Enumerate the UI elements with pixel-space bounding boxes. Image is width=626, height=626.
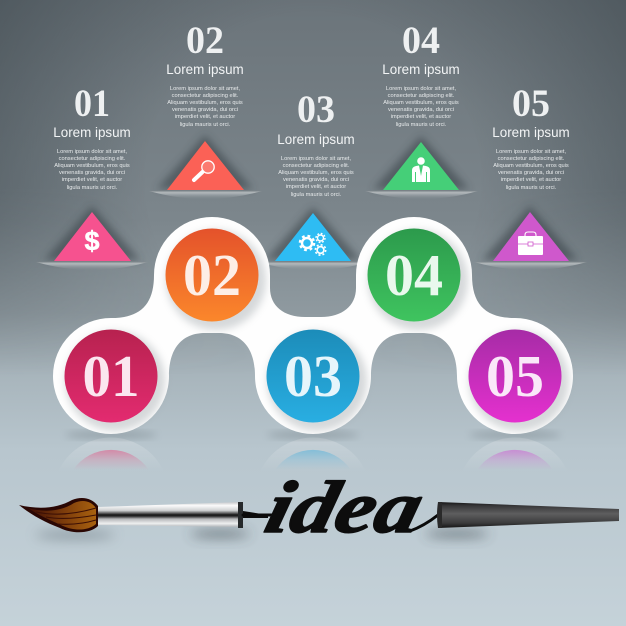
panel: step 03 text (277, 88, 355, 198)
icon: person triangle (365, 136, 478, 199)
body text 04: consectetur adipiscing elit. (388, 93, 455, 99)
heading 03: Lorem ipsum (277, 132, 355, 147)
body text 03: venenatis gravida, dui orci (283, 177, 349, 183)
brush hair (19, 498, 98, 532)
brush ferrule cap (238, 502, 243, 528)
badge 01: 01 (82, 343, 140, 409)
body text 04: ligula mauris ut orci. (396, 122, 447, 128)
heading 01: Lorem ipsum (53, 125, 131, 140)
icon: briefcase triangle (474, 206, 587, 270)
body text 02: imperdiet velit, et auctor (175, 114, 235, 120)
body text 03: imperdiet velit, et auctor (286, 184, 346, 190)
heading 02: Lorem ipsum (166, 62, 244, 77)
panel: step 01 text (53, 82, 131, 191)
badge 04: 04 (385, 242, 443, 308)
number 05: 05 (512, 82, 550, 125)
paint brush (19, 498, 268, 532)
body text 05: Aliquam vestibulum, eros quis (493, 163, 569, 169)
body text 02: venenatis gravida, dui orci (172, 107, 238, 113)
body text 03: consectetur adipiscing elit. (283, 163, 350, 169)
idea lettering: idea (258, 467, 431, 549)
icon: dollar triangle (36, 206, 148, 270)
badge 01 (64, 330, 158, 422)
connected ribbon (53, 217, 573, 439)
body text 01: consectetur adipiscing elit. (59, 156, 126, 162)
badge 05 (468, 330, 562, 422)
body text 04: imperdiet velit, et auctor (391, 114, 451, 120)
body text 05: imperdiet velit, et auctor (501, 177, 561, 183)
body text 02 (167, 86, 243, 128)
body text 02: consectetur adipiscing elit. (172, 93, 239, 99)
icon: magnifier triangle (149, 135, 262, 199)
body text 05: ligula mauris ut orci. (506, 185, 557, 191)
badge 03 (266, 330, 360, 422)
number 01: 01 (74, 82, 110, 125)
icon: dollar triangle: $ (84, 226, 100, 256)
body text 04: venenatis gravida, dui orci (388, 107, 454, 113)
reflections (58, 438, 568, 472)
heading 04: Lorem ipsum (382, 62, 460, 77)
body text 04: Lorem ipsum dolor sit amet, (386, 86, 457, 92)
body text 05: consectetur adipiscing elit. (498, 156, 565, 162)
body text 03: ligula mauris ut orci. (291, 192, 342, 198)
badge 05: 05 (486, 343, 544, 409)
body text 04: Aliquam vestibulum, eros quis (383, 100, 459, 106)
badge 04 (368, 228, 460, 322)
body text 01: imperdiet velit, et auctor (62, 177, 122, 183)
body text 05 (493, 149, 569, 191)
badge 03: 03 (284, 343, 342, 409)
body text 02: Lorem ipsum dolor sit amet, (170, 86, 241, 92)
body text 02: ligula mauris ut orci. (180, 122, 231, 128)
body text 02: Aliquam vestibulum, eros quis (167, 100, 243, 106)
icon: gears triangle (258, 207, 369, 270)
body text 05: venenatis gravida, dui orci (498, 170, 564, 176)
body text 01: Aliquam vestibulum, eros quis (54, 163, 130, 169)
body text 03: Lorem ipsum dolor sit amet, (281, 156, 352, 162)
ground shadows (35, 531, 489, 539)
panel: step 05 text (492, 82, 570, 191)
panel: step 02 text (166, 19, 244, 128)
badge 02: 02 (183, 242, 241, 308)
body text 03 (278, 156, 354, 198)
body text 01 (54, 149, 130, 191)
brush ferrule (98, 502, 240, 527)
number 03: 03 (297, 88, 335, 131)
heading 05: Lorem ipsum (492, 125, 570, 140)
body text 04 (383, 86, 459, 128)
number 04: 04 (402, 19, 440, 62)
marker pen (437, 502, 619, 528)
number 02: 02 (186, 19, 224, 62)
body text 05: Lorem ipsum dolor sit amet, (496, 149, 567, 155)
badge 02 (166, 228, 258, 322)
body text 01: venenatis gravida, dui orci (59, 170, 125, 176)
panel: step 04 text (382, 19, 460, 128)
body text 01: ligula mauris ut orci. (67, 185, 118, 191)
brush tip (243, 511, 268, 518)
body text 03: Aliquam vestibulum, eros quis (278, 170, 354, 176)
body text 01: Lorem ipsum dolor sit amet, (57, 149, 128, 155)
